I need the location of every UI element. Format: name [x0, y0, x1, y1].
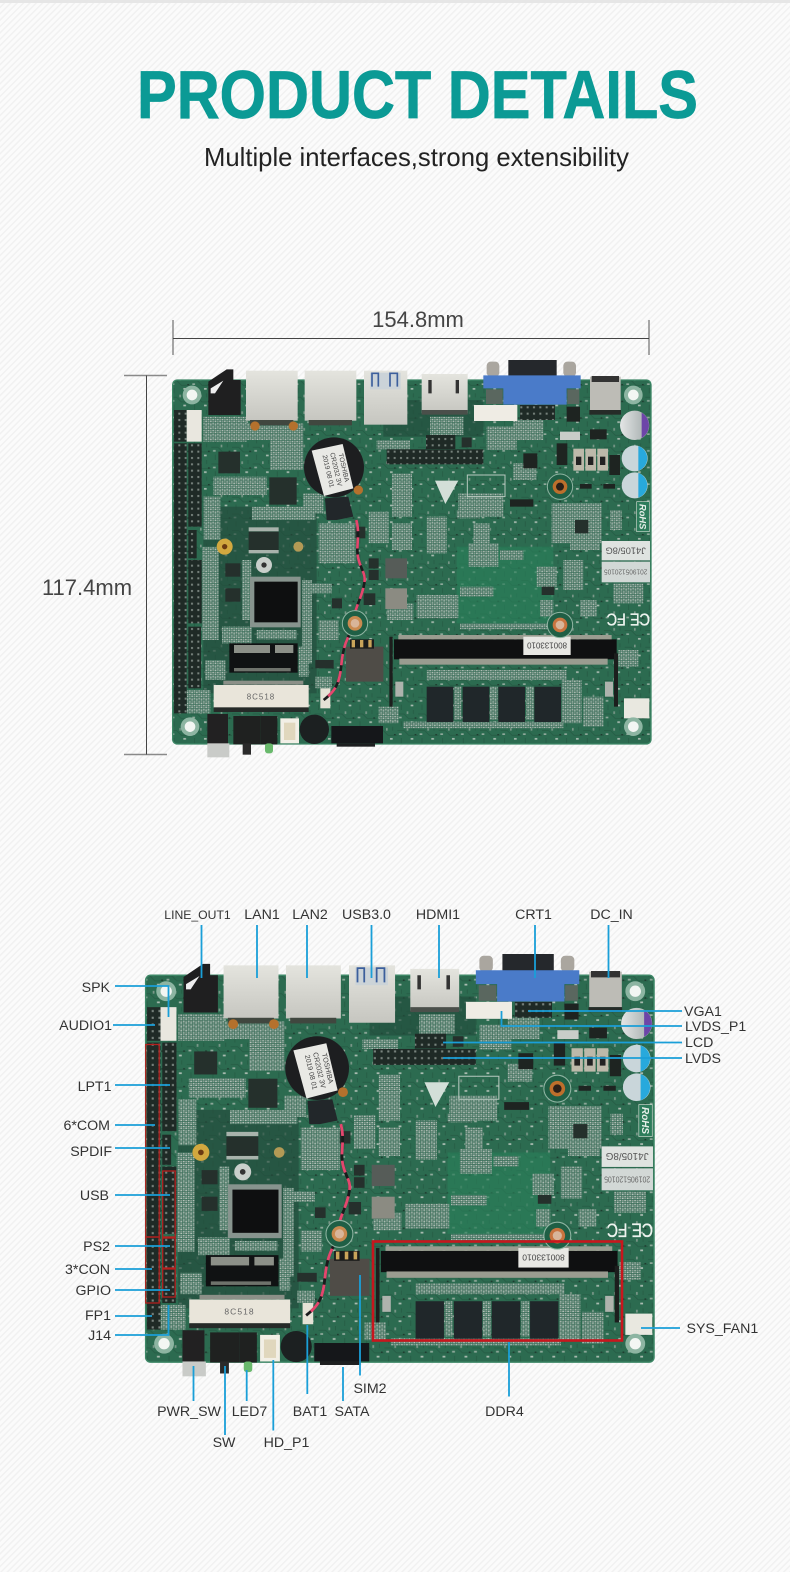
battery: 2019 08 01 [320, 454, 335, 489]
battery: TOSHIBA [337, 453, 350, 483]
board photo with interface labels [146, 954, 654, 1376]
top interface callouts: CRT1 [515, 907, 552, 923]
left interface callouts: LPT1 [78, 1079, 112, 1095]
left interface callouts: AUDIO1 [59, 1018, 112, 1034]
LAN1 port [246, 371, 298, 431]
grey inductors [385, 558, 407, 609]
HDMI port [422, 374, 468, 415]
twisted battery wire [324, 520, 365, 700]
PCB base [173, 380, 651, 744]
left interface callouts: FP1 [85, 1308, 111, 1324]
bottom interface callouts: SATA [335, 1404, 370, 1420]
logo triangle [435, 481, 458, 504]
model label: J4105/8G [605, 545, 646, 555]
bottom interface callouts: SIM2 [353, 1381, 387, 1397]
capacitors [620, 411, 649, 498]
IC chips [218, 437, 588, 668]
square inductors [573, 449, 608, 471]
SMD component clusters [187, 417, 643, 728]
battery: CR2032 3V [328, 452, 343, 488]
mini PCIe slot [229, 643, 298, 673]
RoHS label: RoHS [638, 504, 648, 530]
width dimension [173, 307, 649, 355]
right interface callouts: LVDS_P1 [685, 1019, 746, 1035]
black power parts [510, 407, 620, 507]
top interface callouts: USB3.0 [342, 907, 391, 923]
top interface callouts: DC_IN [590, 907, 633, 923]
corner screw holes [183, 388, 641, 734]
right interface callouts: LVDS [685, 1051, 721, 1067]
RoHS label [637, 502, 649, 532]
bottom interface callouts: HD_P1 [264, 1435, 309, 1451]
LVDS power connector [474, 405, 517, 421]
VGA connector [483, 360, 581, 405]
red boxes: left headers [146, 1044, 175, 1303]
left interface callouts: SPK [82, 980, 111, 996]
SODIMM slot: 800133010 [526, 641, 567, 650]
title: PRODUCT DETAILS [137, 57, 698, 133]
memory chips [427, 687, 561, 722]
white resistor [560, 432, 580, 440]
CE and FCC marks: CE FC [607, 609, 650, 629]
subtitle: Multiple interfaces,strong extensibility [204, 142, 629, 172]
width dimension: 154.8mm [372, 307, 464, 332]
left interface callouts: SPDIF [70, 1144, 112, 1160]
left interface callouts: GPIO [76, 1283, 111, 1299]
DC jack [589, 376, 621, 415]
SIM slot [346, 639, 383, 682]
top interface callouts [164, 907, 633, 978]
white mSATA slot: 8C518 [247, 692, 275, 701]
power switch [207, 714, 229, 757]
LED [265, 743, 273, 753]
chip lead rows [249, 527, 279, 553]
serial label: 201905120105 [604, 567, 647, 576]
battery [304, 437, 364, 520]
reset switch [233, 716, 277, 755]
right interface callouts: VGA1 [684, 1004, 722, 1020]
USB 3.0 port [364, 371, 407, 425]
bottom interface callouts: LED7 [232, 1404, 267, 1420]
fan connector [624, 698, 649, 718]
model label [602, 541, 650, 560]
buzzer [300, 715, 329, 744]
serial label [602, 562, 650, 582]
left interface callouts: 6*COM [63, 1118, 110, 1134]
top interface callouts: HDMI1 [416, 907, 460, 923]
top interface callouts: LAN2 [292, 907, 328, 923]
right interface callouts [443, 1004, 758, 1337]
LAN2 port [305, 371, 356, 425]
top edge shadow [0, 0, 790, 3]
bottom interface callouts: BAT1 [293, 1404, 327, 1420]
height dimension: 117.4mm [42, 575, 132, 600]
SODIMM slot [389, 635, 618, 707]
left interface callouts: 3*CON [65, 1262, 110, 1278]
bottom interface callouts: PWR_SW [157, 1404, 222, 1420]
left interface callouts: USB [80, 1188, 109, 1204]
top interface callouts: LINE_OUT1 [164, 908, 231, 922]
white connector [187, 410, 202, 442]
outlined logic block [467, 475, 505, 497]
height dimension [42, 376, 167, 754]
left interface callouts: J14 [88, 1328, 111, 1344]
left interface callouts: PS2 [83, 1239, 110, 1255]
bottom interface callouts [157, 1275, 524, 1451]
header connector [280, 718, 299, 743]
board photo with dimensions [173, 360, 651, 757]
bottom interface callouts: SW [213, 1435, 236, 1451]
top interface callouts: LAN1 [244, 907, 280, 923]
red box: DDR4 [373, 1242, 622, 1340]
white mSATA slot [214, 681, 309, 712]
small white connector [320, 688, 330, 708]
right interface callouts: LCD [685, 1035, 713, 1051]
bottom interface callouts: DDR4 [485, 1404, 524, 1420]
left interface callouts [59, 980, 170, 1344]
right interface callouts: SYS_FAN1 [686, 1321, 758, 1337]
pin headers [174, 405, 555, 713]
audio jack [208, 369, 241, 415]
SATA connector [331, 726, 383, 747]
main chip [250, 577, 301, 627]
mounting holes [217, 474, 573, 638]
